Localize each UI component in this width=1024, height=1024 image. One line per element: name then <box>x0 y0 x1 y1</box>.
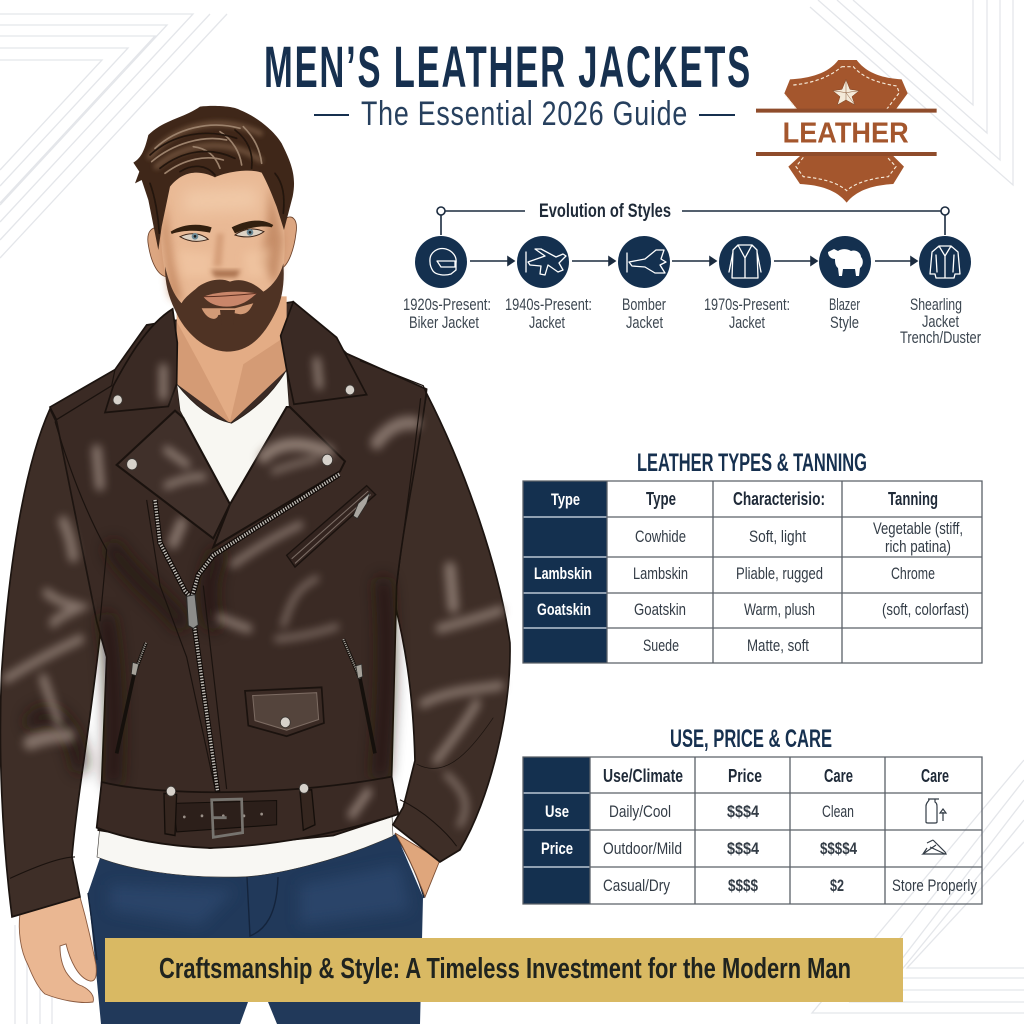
left hand <box>19 897 96 1003</box>
column headers: Use/Climate <box>603 766 683 786</box>
jacket <box>0 296 510 917</box>
table: use, price and care <box>523 757 982 904</box>
dark first column <box>523 757 590 904</box>
timeline labels: Shearling <box>910 295 962 314</box>
table rows: Goatskin <box>537 600 591 619</box>
side pocket zippers <box>117 639 375 753</box>
eyebrows <box>171 221 273 234</box>
column headers: Price <box>728 766 762 786</box>
table rows: Outdoor/Mild <box>603 839 682 858</box>
table rows: $$$$4 <box>820 839 857 858</box>
timeline labels: Jacket <box>922 312 959 331</box>
jacket body <box>50 302 427 848</box>
dark first column <box>523 481 607 663</box>
belt <box>97 777 398 848</box>
timeline labels: 1920s-Present: <box>403 295 491 314</box>
column headers: Type <box>646 489 676 509</box>
banner <box>105 938 903 1002</box>
icon: bomber plane <box>618 236 670 288</box>
star <box>833 79 859 105</box>
table rows: $$$$ <box>728 876 758 895</box>
icon: hanger <box>923 840 946 854</box>
table rows: Chrome <box>891 564 935 583</box>
white shirt hem <box>97 815 393 877</box>
face shading <box>162 183 283 303</box>
neck shading <box>177 321 287 423</box>
table rows: Vegetable (stiff, <box>873 519 963 538</box>
timeline arrows <box>470 257 917 265</box>
table rows: (soft, colorfast) <box>882 600 969 619</box>
badge bars <box>756 109 937 156</box>
icon: helmet <box>415 236 467 288</box>
icon: shearling jacket <box>919 236 971 288</box>
timeline labels <box>403 295 981 347</box>
chest pocket zipper <box>287 486 376 567</box>
table rows: Lambskin <box>633 564 688 583</box>
table rows: $$$4 <box>727 839 759 858</box>
lapel left <box>117 411 230 538</box>
icon: blazer jacket <box>719 236 771 288</box>
table rows: Casual/Dry <box>603 876 670 895</box>
lapel sheen <box>163 361 328 486</box>
column headers: Care <box>824 766 853 786</box>
table rows: Use <box>545 802 569 821</box>
belt holes <box>183 813 263 818</box>
left sleeve <box>0 409 102 917</box>
table rows: Lambskin <box>534 564 592 583</box>
face <box>161 157 285 352</box>
right hand in pocket <box>395 833 440 897</box>
table rows: Price <box>541 839 573 858</box>
beard <box>165 263 284 352</box>
timeline labels: Style <box>830 313 859 332</box>
right sleeve <box>390 394 510 862</box>
column headers: Type <box>551 490 580 509</box>
head <box>133 106 296 352</box>
main zipper <box>155 474 339 796</box>
table rows: Daily/Cool <box>609 802 671 821</box>
badge top leather patch <box>784 60 908 111</box>
column headers <box>603 766 949 786</box>
table rows: Goatskin <box>634 600 686 619</box>
table rows: Store Properly <box>892 876 977 895</box>
table rows <box>541 802 977 895</box>
neck <box>177 296 287 423</box>
column headers: Characterisio: <box>733 489 825 509</box>
timeline: evolution of styles <box>403 201 981 347</box>
table rows: Pliable, rugged <box>736 564 823 583</box>
jacket seams <box>10 361 493 878</box>
badge: leather <box>756 60 937 203</box>
table rows <box>534 519 969 655</box>
table rows: Suede <box>643 636 679 655</box>
icon: cleaner bottle <box>926 799 946 823</box>
lapel right <box>213 407 345 547</box>
metal studs <box>113 385 355 796</box>
table rows: rich patina) <box>885 537 951 556</box>
timeline labels: Jacket <box>626 313 663 332</box>
trousers <box>88 834 424 1024</box>
ears <box>148 217 296 277</box>
illustration: man in leather jacket <box>0 106 510 1024</box>
table rows: $2 <box>830 876 844 895</box>
eyes <box>180 229 264 241</box>
timeline labels: Jacket <box>529 313 565 332</box>
timeline labels: Bomber <box>622 295 666 314</box>
hair <box>133 106 294 250</box>
heading: leather types and tanning: LEATHER TYPES & TANNING <box>637 449 867 477</box>
heading: use, price and care: USE, PRICE & CARE <box>670 725 832 753</box>
table rows: Warm, plush <box>744 600 815 619</box>
shadows and sheen <box>7 423 500 825</box>
hair highlights <box>150 124 284 233</box>
table rows: $$$4 <box>727 802 759 821</box>
timeline labels: Jacket <box>729 313 765 332</box>
table rows: Matte, soft <box>747 636 809 655</box>
column headers <box>551 489 938 509</box>
belt sheen <box>350 789 370 818</box>
column headers: Care <box>921 766 949 786</box>
column headers: Tanning <box>888 489 938 509</box>
timeline labels: 1970s-Present: <box>704 295 790 314</box>
mouth and chin <box>202 292 257 325</box>
table rows: Cowhide <box>635 527 686 546</box>
icon: aviator plane <box>517 236 569 288</box>
table rows: Soft, light <box>749 527 806 546</box>
belt buckle <box>212 799 243 837</box>
zipper pull <box>187 595 198 628</box>
timeline labels: Trench/Duster <box>900 328 981 347</box>
badge word: LEATHER <box>783 118 909 150</box>
collar right <box>281 302 367 404</box>
timeline labels: Biker Jacket <box>409 313 479 332</box>
subtitle: The Essential 2026 Guide <box>361 95 688 133</box>
timeline labels: Blazer <box>829 295 860 314</box>
badge bottom leather patch <box>788 156 904 203</box>
icon: sheep <box>819 236 871 288</box>
table: leather types <box>523 481 982 663</box>
flap pocket <box>245 687 324 736</box>
table rows: Clean <box>822 802 854 821</box>
collar left <box>105 309 177 412</box>
timeline labels: 1940s-Present: <box>505 295 592 314</box>
t-shirt <box>177 370 289 505</box>
timeline heading: Evolution of Styles <box>539 201 671 222</box>
